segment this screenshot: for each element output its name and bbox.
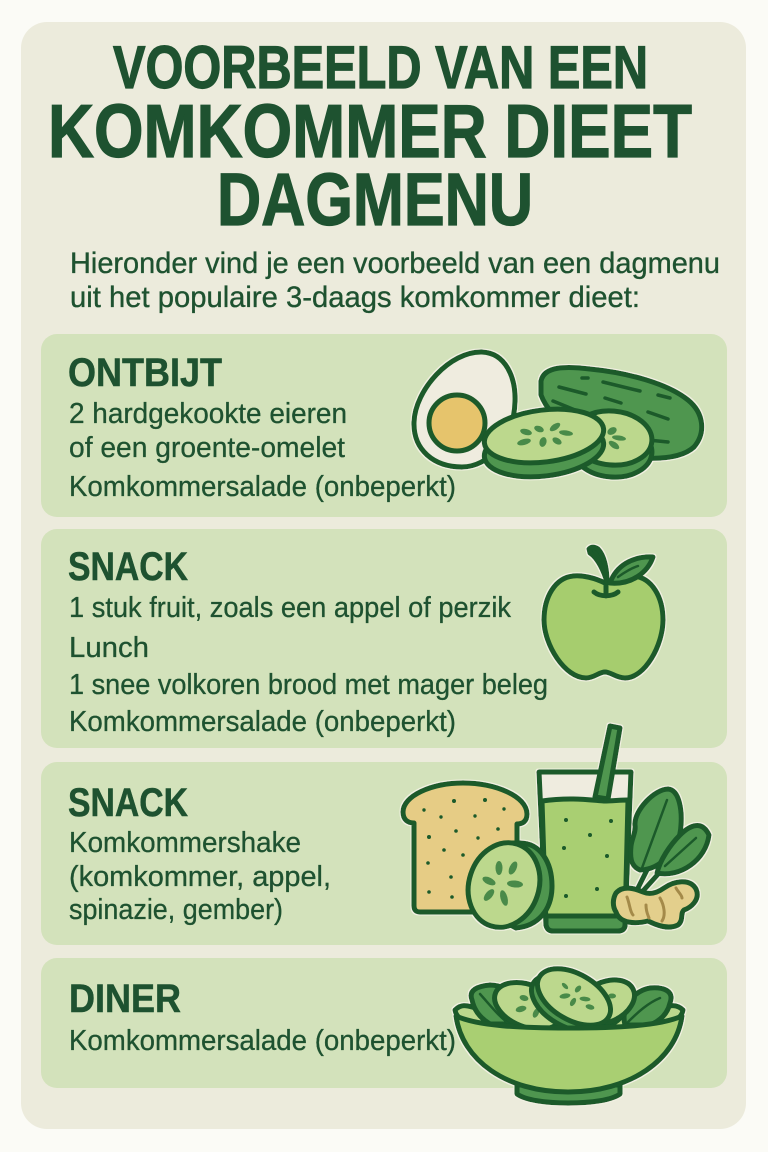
text: shake items xyxy=(69,827,331,926)
text: shake items: spinazie, gember) xyxy=(69,894,283,926)
icon: apple xyxy=(544,547,663,678)
title xyxy=(48,34,692,241)
text: diner item: Komkommersalade (onbeperkt) xyxy=(69,1025,456,1057)
intro text: Hieronder vind je een voorbeeld van een dagmenu xyxy=(70,247,720,280)
intro text xyxy=(70,247,720,314)
heading: snack: SNACK xyxy=(68,781,188,825)
text: shake items: Komkommershake xyxy=(69,827,301,859)
heading: snack: SNACK xyxy=(68,545,188,589)
text: snack and lunch items: 1 stuk fruit, zoals een appel of perzik xyxy=(69,592,511,624)
panel: snack and lunch xyxy=(41,529,727,748)
text: snack and lunch items: Lunch xyxy=(69,632,149,664)
icon: egg and cucumber xyxy=(414,352,702,483)
text: ontbijt items xyxy=(69,398,456,503)
text: ontbijt items: 2 hardgekookte eieren xyxy=(69,398,347,430)
text: ontbijt items: of een groente-omelet xyxy=(69,432,345,464)
title: VOORBEELD VAN EEN xyxy=(113,34,648,101)
text: shake items: (komkommer, appel, xyxy=(69,861,331,893)
icon: bread, shake, spinach and ginger xyxy=(403,726,709,937)
panel: snack shake xyxy=(41,726,727,945)
text: snack and lunch items xyxy=(69,592,548,738)
heading: diner: DINER xyxy=(69,977,181,1021)
text: snack and lunch items: 1 snee volkoren brood met mager beleg xyxy=(69,669,548,701)
intro text: uit het populaire 3-daags komkommer dieet: xyxy=(70,281,640,314)
icon: salad bowl xyxy=(455,957,683,1103)
text: snack and lunch items: Komkommersalade (onbeperkt) xyxy=(69,706,456,738)
heading: ontbijt: ONTBIJT xyxy=(68,351,222,395)
text: ontbijt items: Komkommersalade (onbeperkt) xyxy=(69,471,456,503)
panel: ontbijt xyxy=(41,334,727,517)
panel: diner xyxy=(41,957,727,1103)
title: DAGMENU xyxy=(217,158,533,241)
